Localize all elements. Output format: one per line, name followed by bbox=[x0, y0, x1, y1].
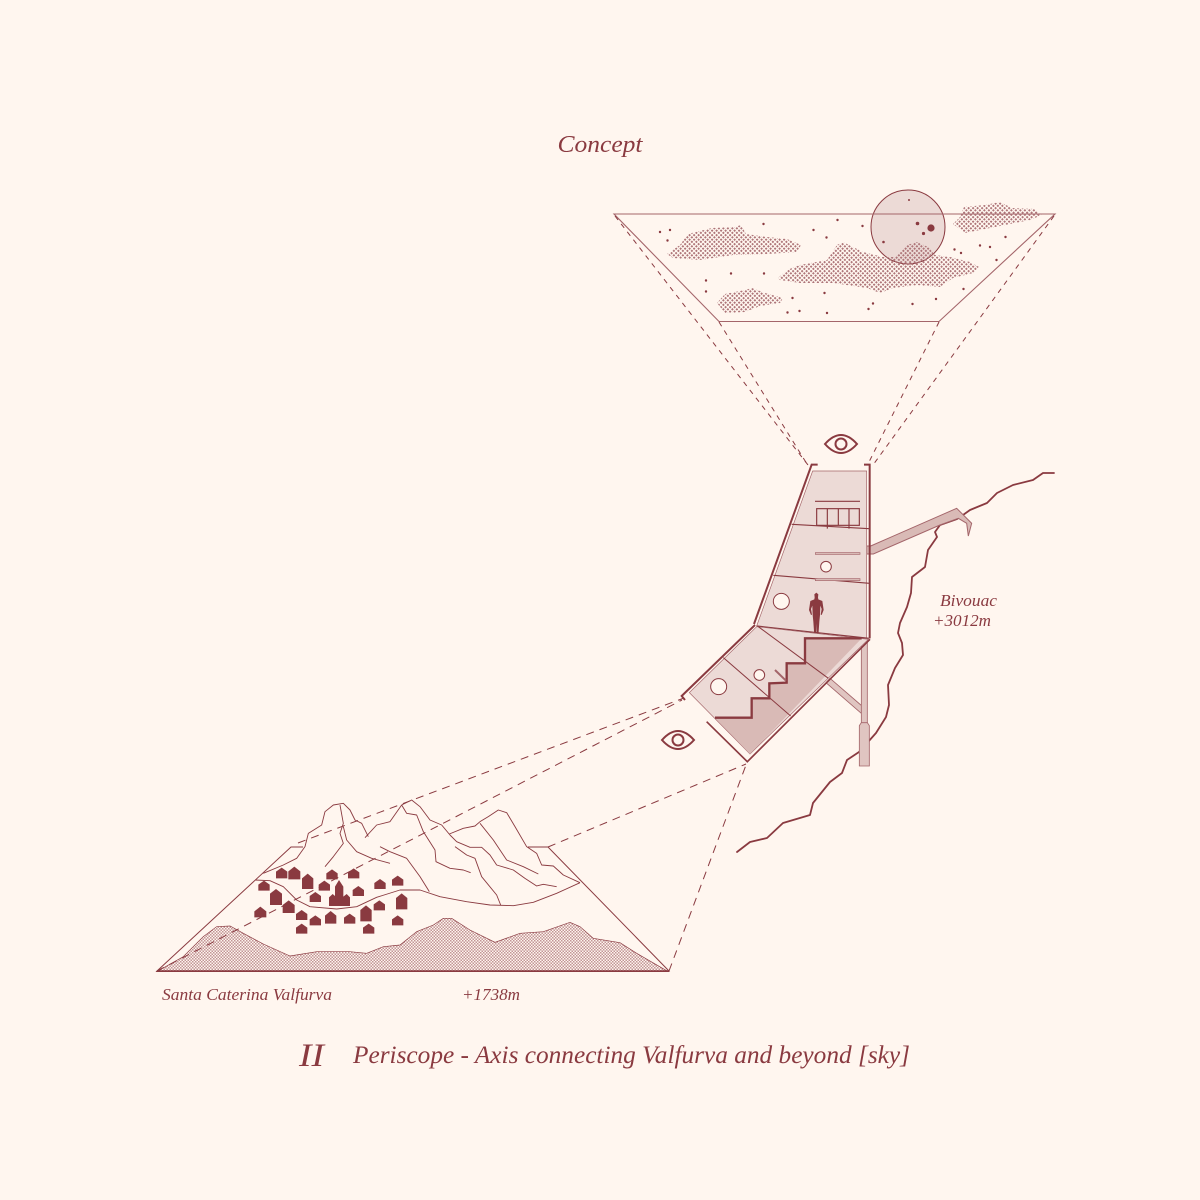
portholes bbox=[821, 561, 831, 572]
clouds bbox=[667, 202, 1042, 313]
label: bivouac bbox=[933, 591, 998, 630]
lower outer walls bbox=[682, 625, 755, 700]
label: bivouac: Bivouac bbox=[940, 591, 998, 610]
floors bbox=[757, 524, 869, 638]
panel: periscope lower module bbox=[682, 625, 870, 762]
mountain outlines bbox=[255, 800, 580, 909]
moon bbox=[871, 190, 945, 264]
label: altitude: +1738m bbox=[462, 985, 520, 1004]
icon: lower eye bbox=[662, 731, 694, 749]
support strut and column bbox=[826, 638, 869, 766]
upper module fill bbox=[757, 471, 867, 638]
label: bivouac: +3012m bbox=[933, 611, 991, 630]
panel: valley landscape bbox=[157, 800, 669, 972]
title: Concept bbox=[558, 131, 644, 158]
sight lines: valley to eye bbox=[157, 698, 746, 971]
label: santa caterina: Santa Caterina Valfurva bbox=[162, 985, 332, 1004]
handrail bbox=[775, 670, 786, 681]
dividers bbox=[723, 627, 828, 716]
lower portholes bbox=[711, 679, 727, 695]
stair mass bbox=[715, 638, 862, 754]
bridge arm to cliff bbox=[867, 508, 972, 554]
outer left wall bbox=[754, 465, 818, 624]
lower module fill bbox=[689, 627, 868, 754]
houses bbox=[254, 867, 407, 934]
window and shelves bbox=[815, 501, 860, 581]
ground hatch bbox=[157, 918, 668, 972]
stairs bbox=[715, 638, 862, 718]
stars bbox=[659, 199, 1007, 314]
sky frame bbox=[614, 214, 1055, 322]
panel: sky trapezoid bbox=[614, 190, 1055, 322]
caption: Periscope - Axis connecting Valfurva and beyond [sky] bbox=[352, 1042, 910, 1069]
outer right wall bbox=[864, 465, 870, 638]
caption numeral: II bbox=[298, 1038, 326, 1074]
icon: upper eye bbox=[825, 435, 857, 453]
cliff line bbox=[737, 473, 1054, 852]
sight lines: sky to eye bbox=[615, 216, 1054, 465]
person silhouette bbox=[809, 593, 824, 636]
land frame bbox=[157, 847, 669, 971]
panel: periscope upper module bbox=[754, 465, 870, 638]
